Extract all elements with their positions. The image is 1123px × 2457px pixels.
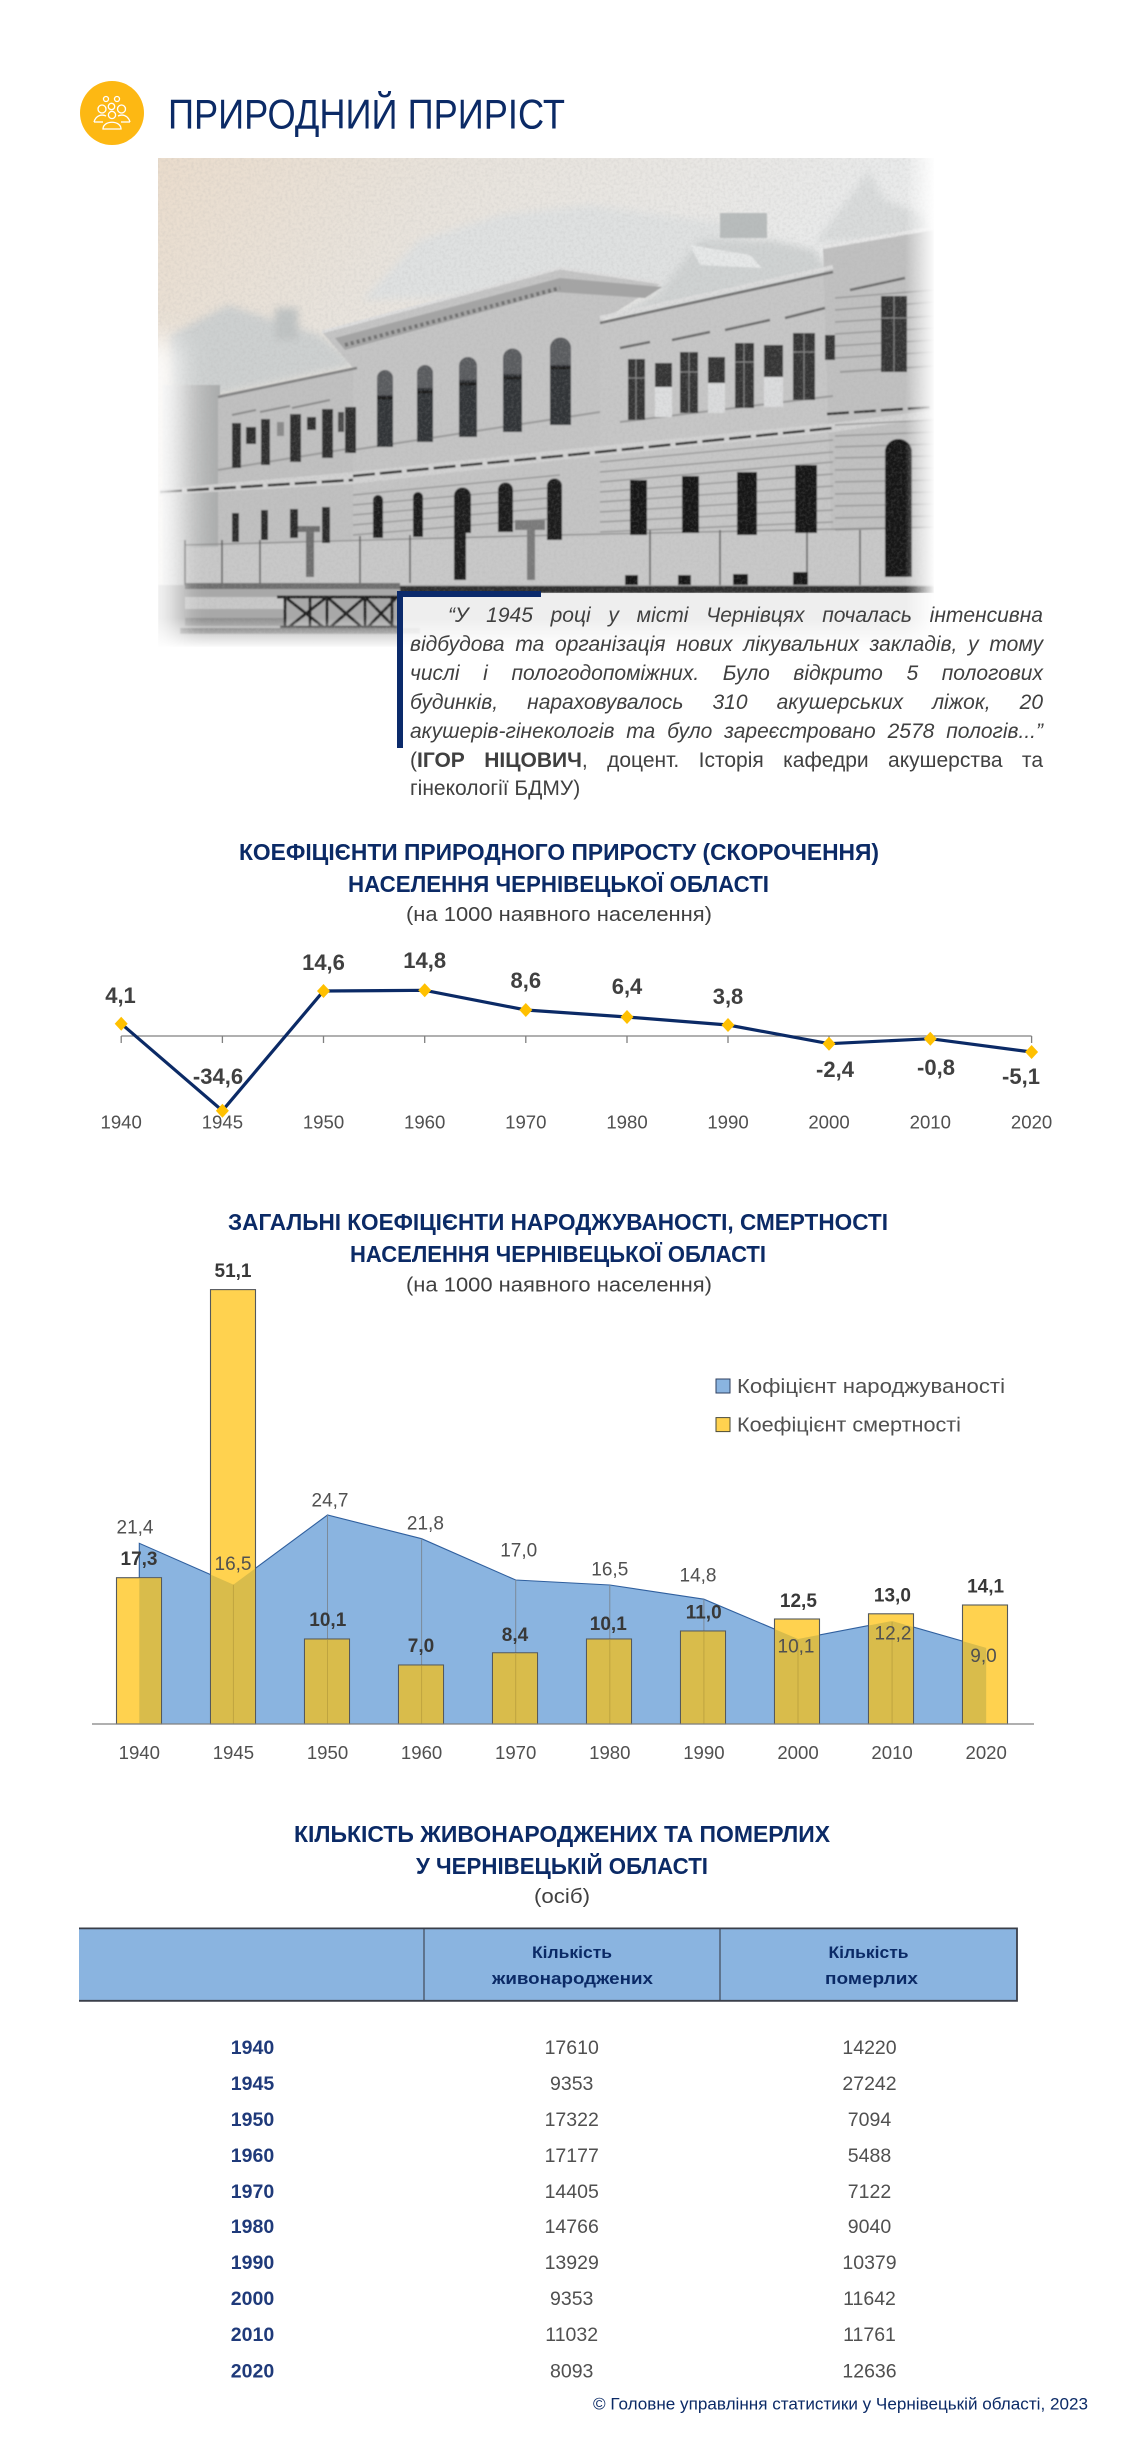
death-rate value labels: 14,1	[967, 1576, 1005, 1598]
right wing lower windows	[625, 439, 912, 585]
quote veil over photo	[403, 593, 934, 649]
table rows: 1970	[231, 2181, 274, 2203]
table: births and deaths by year	[79, 1928, 1018, 2382]
quote text: відбудова та організація нових лікувальних закладів, у тому	[410, 633, 1043, 656]
death-rate value labels: 8,4	[502, 1625, 529, 1646]
year labels: 1945	[202, 1112, 243, 1132]
year labels: 1940	[119, 1742, 160, 1763]
year labels	[101, 1112, 1052, 1132]
data markers	[115, 983, 1038, 1118]
table rows: 14405	[545, 2181, 599, 2203]
quote text: будинків, нараховувалось 310 акушерських ліжок, 20	[410, 691, 1043, 714]
birth-rate value labels: 14,8	[680, 1566, 716, 1586]
year labels: 2000	[777, 1742, 819, 1763]
table rows: 1980	[231, 2216, 274, 2238]
year labels: 1950	[303, 1112, 344, 1132]
heading: birth and death rates chart: ЗАГАЛЬНІ КОЕФІЦІЄНТИ НАРОДЖУВАНОСТІ, СМЕРТНОСТІ	[228, 1209, 888, 1235]
year labels: 1990	[683, 1742, 725, 1763]
table rows: 9040	[848, 2216, 891, 2238]
birth-rate value labels: 21,4	[117, 1518, 154, 1538]
table rows: 17322	[545, 2109, 599, 2131]
death-rate value labels: 51,1	[215, 1261, 252, 1282]
table rows: 1945	[231, 2073, 274, 2095]
quote accent left bar	[397, 591, 403, 748]
right wing upper windows	[628, 296, 907, 420]
table rows: 1960	[231, 2145, 274, 2167]
axis	[121, 1036, 1032, 1043]
value labels: -5,1	[1002, 1064, 1040, 1089]
table header: живонароджених	[491, 1969, 654, 1988]
quote text	[410, 604, 1044, 800]
birth-rate value labels: 16,5	[215, 1554, 251, 1575]
heading: births and deaths table: КІЛЬКІСТЬ ЖИВОНАРОДЖЕНИХ ТА ПОМЕРЛИХ	[294, 1821, 831, 1847]
birth-rate value labels: 16,5	[591, 1560, 628, 1580]
table rows: 7122	[848, 2181, 891, 2203]
year labels: 1980	[589, 1742, 630, 1763]
table rows: 17177	[545, 2145, 599, 2167]
birth-rate value labels: 10,1	[778, 1636, 814, 1658]
line chart: natural increase coefficients	[101, 948, 1052, 1132]
table rows: 7094	[848, 2109, 891, 2131]
heading: birth and death rates chart: НАСЕЛЕННЯ ЧЕРНІВЕЦЬКОЇ ОБЛАСТІ	[350, 1241, 766, 1267]
bars: death rate	[116, 1290, 1008, 1724]
year labels: 1945	[213, 1742, 254, 1763]
ground	[158, 585, 934, 647]
value labels: 14,8	[403, 948, 446, 973]
year labels: 1970	[495, 1742, 536, 1763]
death-rate value labels	[121, 1261, 1005, 1657]
quote accent top bar	[397, 591, 541, 597]
value labels: -2,4	[816, 1057, 855, 1082]
table rows	[231, 2037, 897, 2382]
heading: natural increase chart: НАСЕЛЕННЯ ЧЕРНІВЕЦЬКОЇ ОБЛАСТІ	[348, 871, 769, 897]
table rows: 8093	[550, 2360, 593, 2382]
death-rate value labels: 13,0	[874, 1586, 911, 1606]
data line	[121, 990, 1032, 1111]
birth-rate value labels: 21,8	[407, 1514, 444, 1534]
death-rate value labels: 10,1	[590, 1614, 627, 1635]
statue and lantern	[515, 520, 545, 580]
heading: natural increase chart	[239, 839, 879, 926]
value labels	[105, 948, 1040, 1089]
death-rate value labels: 7,0	[408, 1636, 434, 1657]
scaffold	[277, 597, 400, 630]
photo: maternity hospital building	[158, 158, 934, 646]
heading: birth and death rates chart	[228, 1209, 888, 1296]
film grain	[158, 158, 934, 647]
birth-rate value labels: 17,0	[500, 1540, 537, 1562]
quote text: (ІГОР НІЦОВИЧ, доцент. Історія кафедри акушерства та	[410, 749, 1043, 772]
death-rate value labels: 17,3	[121, 1549, 157, 1570]
year labels: 1950	[307, 1742, 348, 1763]
heading: births and deaths table: (осіб)	[534, 1885, 590, 1908]
table rows: 11032	[545, 2324, 598, 2346]
legend: Коефіцієнт смертності	[737, 1414, 961, 1436]
panel: quote text box	[397, 591, 932, 748]
heading: natural increase chart: КОЕФІЦІЄНТИ ПРИРОДНОГО ПРИРОСТУ (СКОРОЧЕННЯ)	[239, 839, 879, 865]
table header	[79, 1928, 1017, 2001]
year labels: 1980	[606, 1112, 648, 1132]
combo chart: birth rate area and death rate bars	[92, 1261, 1034, 1763]
quote text: акушерів-гінекологів та було зареєстровано 2578 пологів...”	[410, 720, 1043, 743]
birth-rate value labels: 24,7	[312, 1490, 348, 1512]
far-left and left wing	[218, 367, 357, 590]
table rows: 17610	[545, 2037, 599, 2059]
year labels: 2010	[910, 1112, 951, 1132]
central pavilion	[322, 268, 662, 590]
table rows: 9353	[550, 2288, 593, 2310]
legend	[716, 1376, 1005, 1436]
bar overlap with area	[139, 1569, 986, 1724]
arched upper windows, central pavilion	[377, 340, 571, 447]
table header: Кількість	[828, 1943, 908, 1962]
year labels: 1990	[707, 1112, 749, 1132]
death-rate value labels: 12,5	[780, 1591, 817, 1612]
arched lower windows	[373, 479, 562, 580]
table rows: 1990	[231, 2252, 274, 2274]
year labels: 2020	[1011, 1112, 1052, 1132]
icon: people in yellow circle	[80, 81, 144, 145]
table rows: 12636	[842, 2360, 897, 2382]
value labels: 4,1	[105, 983, 136, 1008]
left wing lower windows	[232, 507, 330, 543]
table rows: 1940	[231, 2037, 274, 2059]
quote text: числі і пологодопоміжних. Було відкрито 5 пологових	[410, 662, 1043, 685]
quote text: гінекології БДМУ)	[410, 777, 580, 800]
birth-rate value labels	[117, 1490, 997, 1667]
table rows: 14766	[545, 2216, 599, 2238]
table rows: 11761	[843, 2324, 896, 2346]
heading: births and deaths table: У ЧЕРНІВЕЦЬКІЙ ОБЛАСТІ	[416, 1852, 708, 1879]
table rows: 9353	[550, 2073, 593, 2095]
table rows: 2000	[231, 2288, 274, 2310]
year labels: 1940	[101, 1112, 142, 1132]
table rows: 13929	[545, 2252, 599, 2274]
heading: natural increase chart: (на 1000 наявного населення)	[406, 903, 712, 926]
value labels: 6,4	[612, 974, 643, 999]
birth-rate value labels: 9,0	[970, 1646, 997, 1667]
value labels: 14,6	[302, 950, 345, 975]
entablature	[335, 278, 662, 350]
quote text: “У 1945 році у місті Чернівцях почалась інтенсивна	[448, 604, 1043, 627]
table rows: 1950	[231, 2109, 274, 2131]
death-rate value labels: 10,1	[309, 1610, 347, 1631]
right wing	[600, 272, 833, 590]
year labels: 2010	[871, 1742, 913, 1763]
table rows: 27242	[842, 2073, 897, 2095]
table rows: 2010	[231, 2324, 274, 2346]
year labels	[119, 1742, 1007, 1763]
legend: Кофіцієнт народжуваності	[737, 1376, 1005, 1398]
table rows: 11642	[843, 2288, 896, 2310]
year labels: 2000	[808, 1112, 850, 1132]
value labels: 8,6	[511, 968, 541, 993]
table header: Кількість	[532, 1943, 612, 1962]
vignette	[128, 340, 178, 680]
floor band	[160, 410, 934, 495]
table rows: 2020	[231, 2360, 274, 2382]
birth-rate value labels: 12,2	[875, 1624, 911, 1644]
left wing upper windows	[232, 407, 356, 468]
area: birth rate	[139, 1515, 986, 1724]
table rows: 5488	[848, 2145, 891, 2167]
heading: births and deaths table	[294, 1821, 831, 1908]
tower	[823, 226, 934, 590]
value labels: -0,8	[917, 1055, 955, 1080]
fence zone	[185, 528, 934, 585]
table rows: 14220	[842, 2037, 897, 2059]
year labels: 1960	[401, 1742, 442, 1763]
upper cornices	[620, 278, 905, 348]
table rows: 10379	[842, 2252, 897, 2274]
rustication lines	[353, 290, 934, 535]
year labels: 2020	[966, 1742, 1007, 1763]
value labels: -34,6	[193, 1064, 243, 1089]
baseline	[92, 1723, 1034, 1725]
year labels: 1970	[505, 1112, 546, 1132]
heading: birth and death rates chart: (на 1000 наявного населення)	[406, 1274, 712, 1296]
year labels: 1960	[404, 1112, 445, 1132]
table header: померлих	[825, 1969, 919, 1988]
source note: © Головне управління статистики у Чернівецькій області, 2023	[593, 2394, 1088, 2414]
value labels: 3,8	[713, 984, 743, 1009]
death-rate value labels: 11,0	[686, 1602, 722, 1624]
